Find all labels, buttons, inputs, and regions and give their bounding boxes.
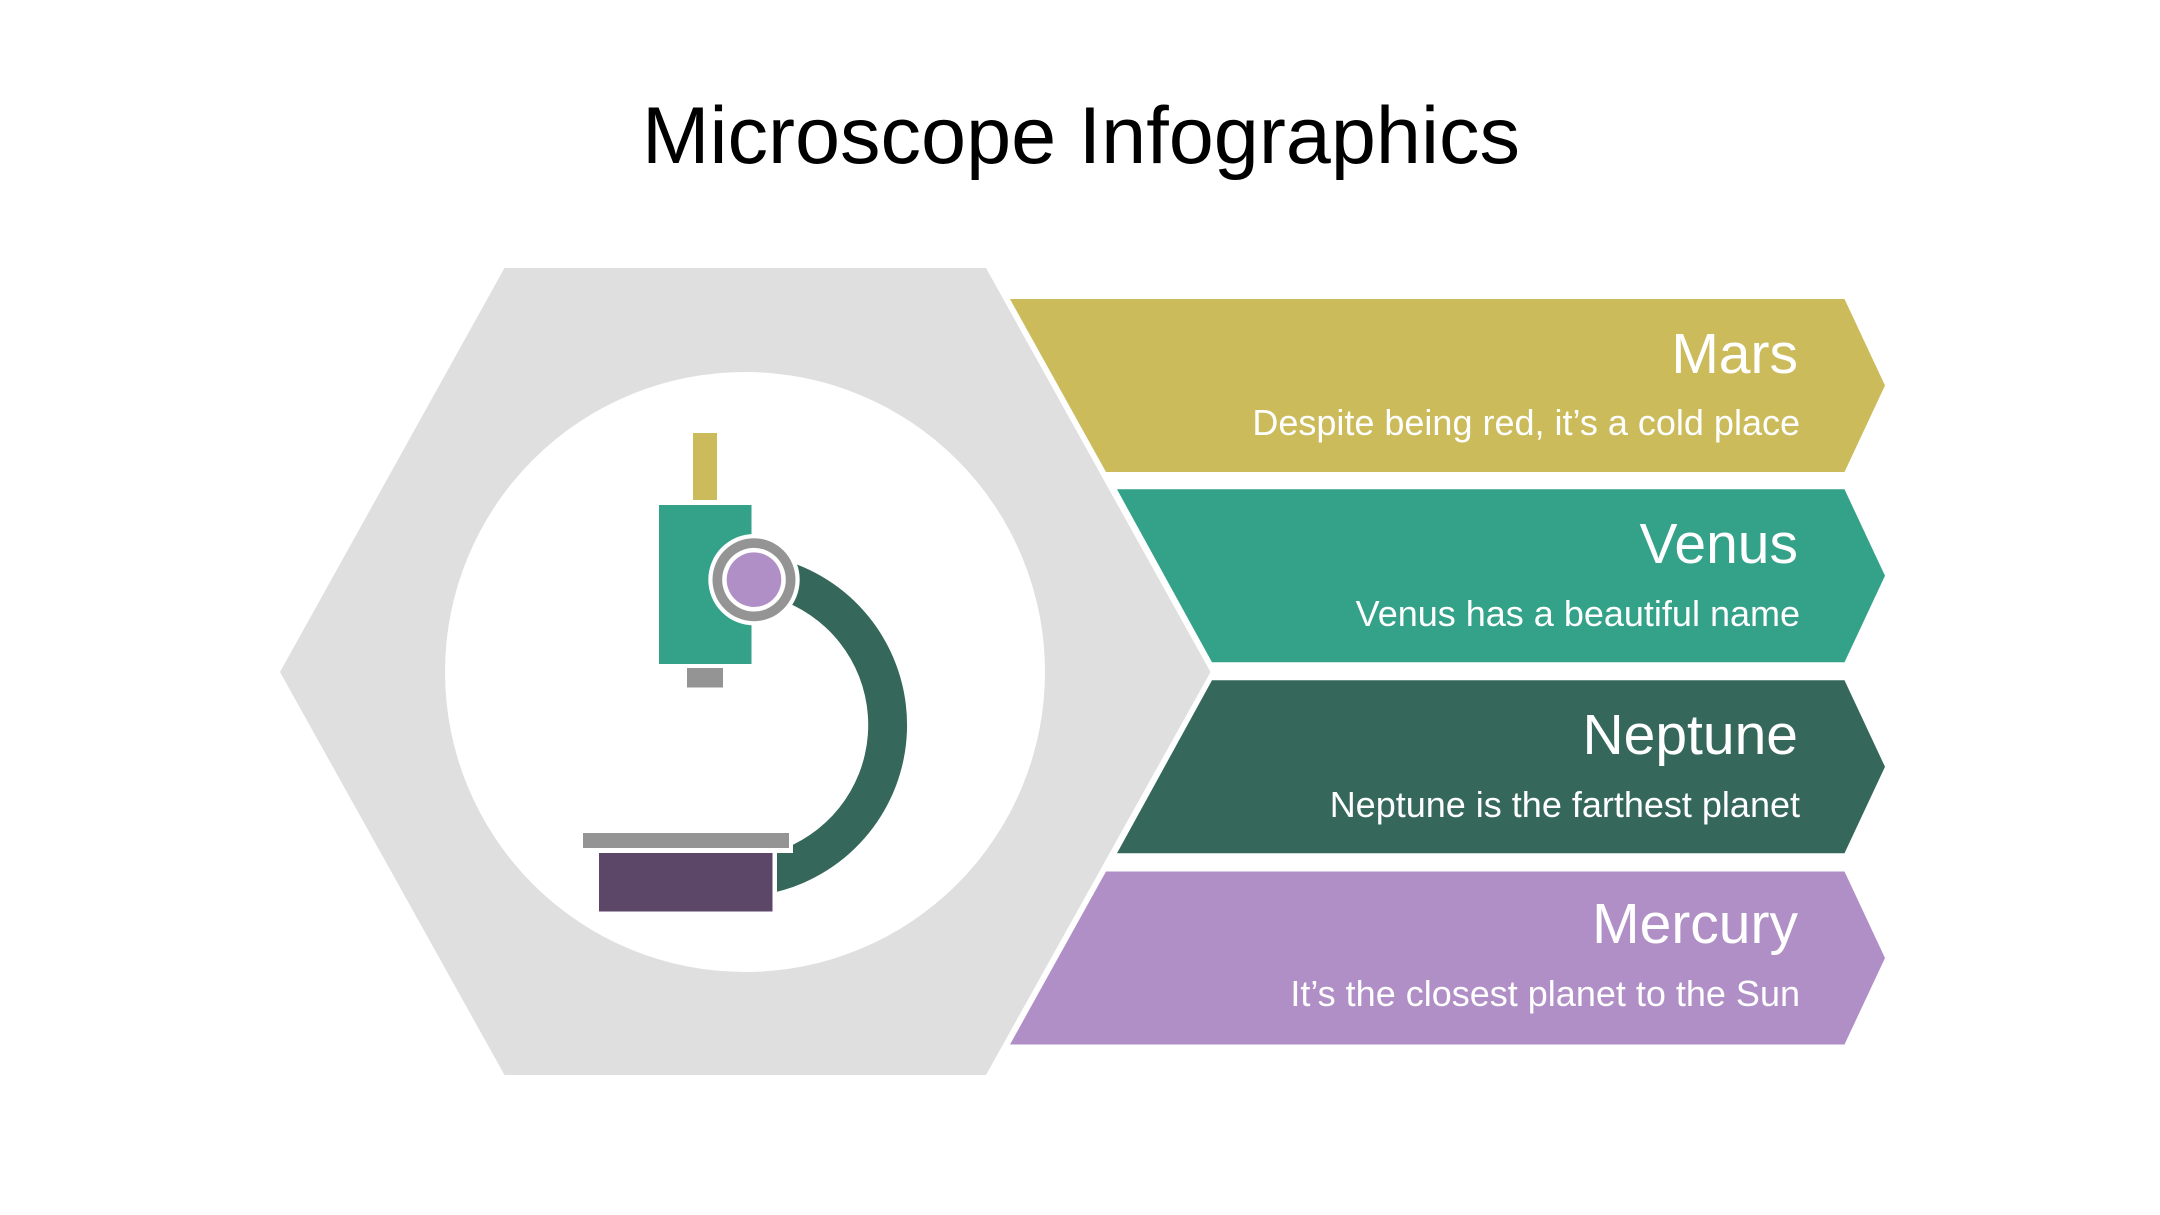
panel: Neptune: Neptune is the farthest planet: [1330, 784, 1800, 825]
panel: Mercury: [1010, 872, 1885, 1044]
panel: Venus: [1117, 489, 1885, 662]
objective lens: [687, 668, 723, 688]
panel: Venus: Venus has a beautiful name: [1356, 593, 1800, 634]
panel: Mars: Despite being red, it’s a cold place: [1252, 402, 1800, 443]
panel: Venus: Venus: [1640, 512, 1798, 576]
microscope arm: [775, 562, 907, 892]
title: Microscope Infographics: [642, 91, 1520, 181]
microscope body: [659, 505, 752, 664]
panel: Neptune: Neptune: [1582, 703, 1798, 767]
focus knob: [708, 534, 800, 625]
panel: hexagon with microscope: [280, 268, 1210, 1075]
panel: Mars: Mars: [1671, 322, 1798, 386]
icon: microscope: [583, 433, 907, 912]
panel: Mercury: Mercury: [1592, 892, 1798, 956]
panel: Mercury: It’s the closest planet to the Sun: [1290, 973, 1800, 1014]
hexagon background: [280, 268, 1210, 1075]
stage plate: [583, 833, 789, 848]
panel: Neptune: [1117, 680, 1885, 853]
panel: Mars: [1010, 299, 1885, 472]
microscope base: [599, 853, 772, 912]
eyepiece: [693, 433, 717, 500]
white circle: [445, 372, 1045, 972]
